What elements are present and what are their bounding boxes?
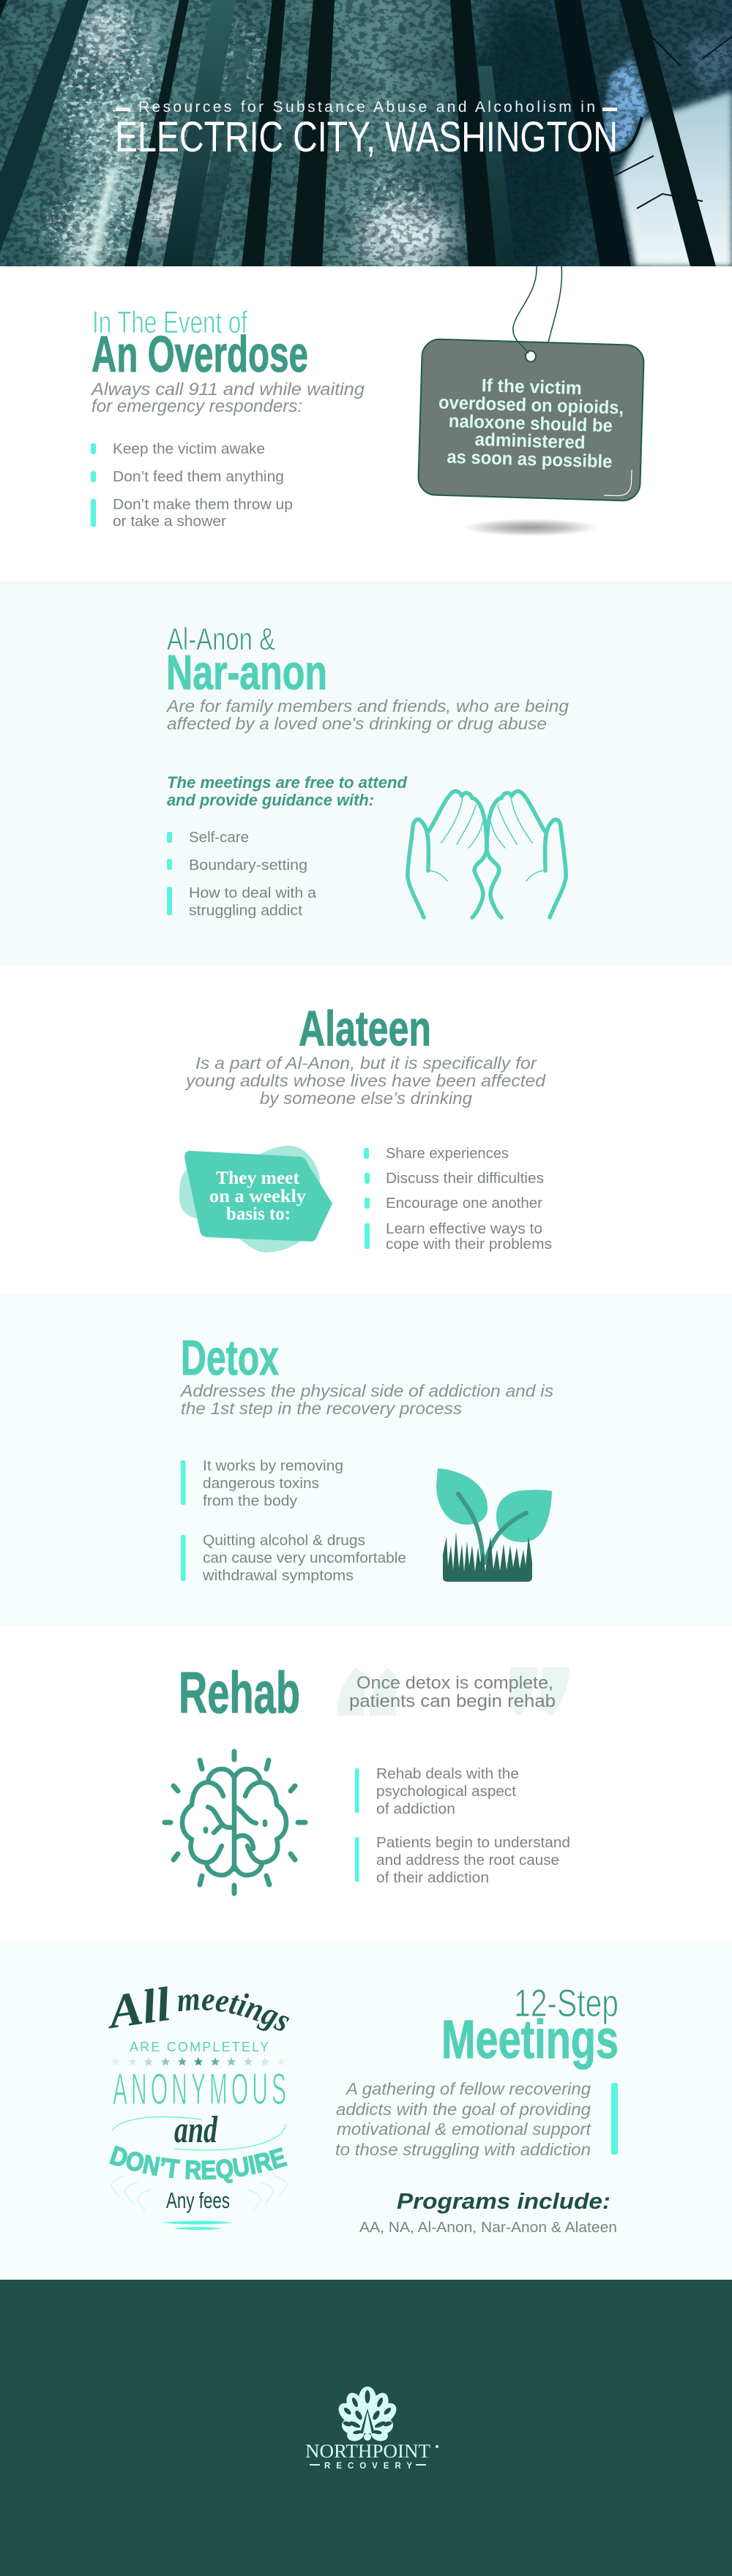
swashes	[112, 2117, 285, 2150]
bullet list: Don’t feed them anything	[113, 469, 284, 485]
heading: nar-anon: Nar-anon	[166, 645, 327, 700]
panel: detox	[0, 1294, 732, 1626]
programs list: AA, NA, Al-Anon, Nar-Anon & Alateen	[359, 2220, 617, 2236]
row of stars	[111, 2057, 285, 2066]
script: all meetings: All	[102, 1978, 174, 2039]
bullet list: Discuss their difficulties	[386, 1171, 544, 1187]
shadow below tag	[463, 519, 598, 536]
bullet list: How to deal with a	[189, 885, 317, 901]
icon: brain	[165, 1751, 305, 1893]
description: A gathering of fellow recovering	[345, 2079, 591, 2098]
subtitle: Resources for Substance Abuse and Alcoholism in	[138, 99, 595, 116]
icon: plant	[436, 1468, 552, 1582]
description	[165, 696, 569, 733]
description: affected by a loved one's drinking or drug abuse	[167, 714, 547, 733]
heading: 12-step: 12-Step	[514, 1982, 619, 2025]
callout: weekly meetings	[179, 1146, 332, 1253]
description: motivational & emotional support	[337, 2119, 592, 2138]
bullet list: from the body	[203, 1493, 297, 1509]
any fees: Any fees	[166, 2188, 230, 2213]
bullet list	[355, 1766, 570, 1886]
intro text: for emergency responders:	[92, 397, 302, 416]
bullet list: and address the root cause	[376, 1852, 559, 1869]
description: the 1st step in the recovery process	[181, 1399, 463, 1418]
bullet list: Quitting alcohol & drugs	[203, 1533, 365, 1549]
script: all meetings	[102, 1978, 290, 2039]
hanging tag: If the victim	[481, 375, 582, 399]
heading: an overdose: An Overdose	[92, 326, 308, 383]
panel: hero header	[0, 0, 732, 278]
hanging tag: overdosed on opioids,	[438, 392, 624, 418]
bullet list: It works by removing	[203, 1458, 343, 1474]
heading: in the event of: In The Event of	[92, 305, 248, 340]
script: all meetings: meetings	[178, 1993, 290, 2031]
are completely: ARE COMPLETELY	[130, 2040, 269, 2054]
bullet list	[181, 1458, 406, 1584]
description	[179, 1381, 554, 1418]
bullet list: Learn effective ways to	[386, 1221, 542, 1237]
bullet list: Self-care	[189, 830, 249, 846]
panel: in the event of an overdose	[0, 266, 732, 581]
intro text: Always call 911 and while waiting	[90, 380, 365, 399]
description: Are for family members and friends, who are being	[165, 696, 569, 716]
panel: 12-step meetings	[102, 1978, 619, 2236]
panel: footer	[0, 2280, 732, 2576]
subheading: and provide guidance with:	[167, 791, 374, 809]
bullet list: of addiction	[376, 1801, 455, 1817]
programs heading: Programs include:	[397, 2188, 610, 2214]
script: and: and	[174, 2109, 218, 2151]
anonymous: ANONYMOUS	[113, 2065, 286, 2114]
accent bar	[611, 2083, 618, 2155]
icon: praying hands	[408, 791, 566, 917]
description: Is a part of Al-Anon, but it is specifically for	[195, 1054, 537, 1073]
bullet list	[91, 441, 293, 530]
bullet list: withdrawal symptoms	[202, 1568, 354, 1584]
bullet list: or take a shower	[113, 514, 226, 530]
description: to those struggling with addiction	[335, 2140, 591, 2159]
bullet list: of their addiction	[376, 1870, 489, 1886]
description	[335, 2079, 592, 2159]
bullet list: Keep the victim awake	[113, 441, 265, 457]
description: by someone else’s drinking	[260, 1089, 472, 1108]
bullet list: Patients begin to understand	[376, 1835, 570, 1851]
bullet list: cope with their problems	[386, 1236, 552, 1253]
bullet list: Share experiences	[386, 1146, 509, 1162]
description: young adults whose lives have been affected	[184, 1071, 546, 1090]
description	[184, 1054, 546, 1108]
bullet list: struggling addict	[189, 903, 302, 919]
logo wordmark: NORTHPOINT	[305, 2440, 430, 2462]
bullet list: Don’t make them throw up	[113, 497, 293, 513]
heading: al-anon: Al-Anon &	[167, 622, 275, 657]
panel: rehab	[0, 1626, 732, 1940]
heading: alateen: Alateen	[299, 1001, 431, 1056]
heading: detox: Detox	[181, 1330, 279, 1386]
intro text	[90, 380, 365, 416]
logo wordmark: RECOVERY	[324, 2462, 412, 2471]
bullet list: Rehab deals with the	[376, 1766, 519, 1782]
description: Addresses the physical side of addiction and is	[179, 1381, 554, 1400]
panel: al-anon and nar-anon	[0, 581, 732, 966]
forest photo illustration	[0, 0, 732, 278]
underline strokes	[161, 2221, 234, 2230]
bullet list: can cause very uncomfortable	[203, 1550, 406, 1566]
logo wordmark	[305, 2440, 438, 2471]
subheading: The meetings are free to attend	[167, 773, 408, 792]
hanging tag: as soon as possible	[447, 447, 613, 472]
hanging tag: naloxone should be	[448, 411, 613, 436]
bullet list: psychological aspect	[376, 1784, 516, 1800]
hanging tag	[418, 266, 644, 501]
logo: northpoint recovery	[305, 2387, 438, 2471]
quote text	[349, 1673, 556, 1711]
bullet list: Boundary-setting	[189, 857, 307, 874]
bullet list	[364, 1146, 552, 1253]
lettering: all meetings anonymous	[102, 1978, 290, 2230]
callout: weekly meetings: They meet	[216, 1168, 300, 1188]
panel: alateen	[0, 966, 732, 1294]
pale arcs	[111, 2176, 287, 2212]
heading: rehab: Rehab	[179, 1660, 300, 1725]
bullet list: dangerous toxins	[203, 1476, 319, 1492]
main title: ELECTRIC CITY, WASHINGTON	[115, 113, 618, 161]
curved: don't require: DON’T REQUIRE	[109, 2145, 288, 2183]
quote text: Once detox is complete,	[356, 1673, 553, 1693]
callout: weekly meetings: basis to:	[226, 1204, 291, 1224]
description: addicts with the goal of providing	[336, 2100, 591, 2119]
hanging tag: administered	[474, 429, 586, 453]
bullet list	[167, 830, 317, 919]
heading: meetings: Meetings	[441, 2009, 619, 2070]
quote text: patients can begin rehab	[349, 1691, 556, 1711]
decorative quotation marks	[337, 1667, 569, 1716]
callout: weekly meetings: on a weekly	[209, 1187, 307, 1206]
bullet list: Encourage one another	[386, 1195, 542, 1212]
logo mark	[335, 2387, 400, 2444]
subheading	[167, 773, 408, 809]
